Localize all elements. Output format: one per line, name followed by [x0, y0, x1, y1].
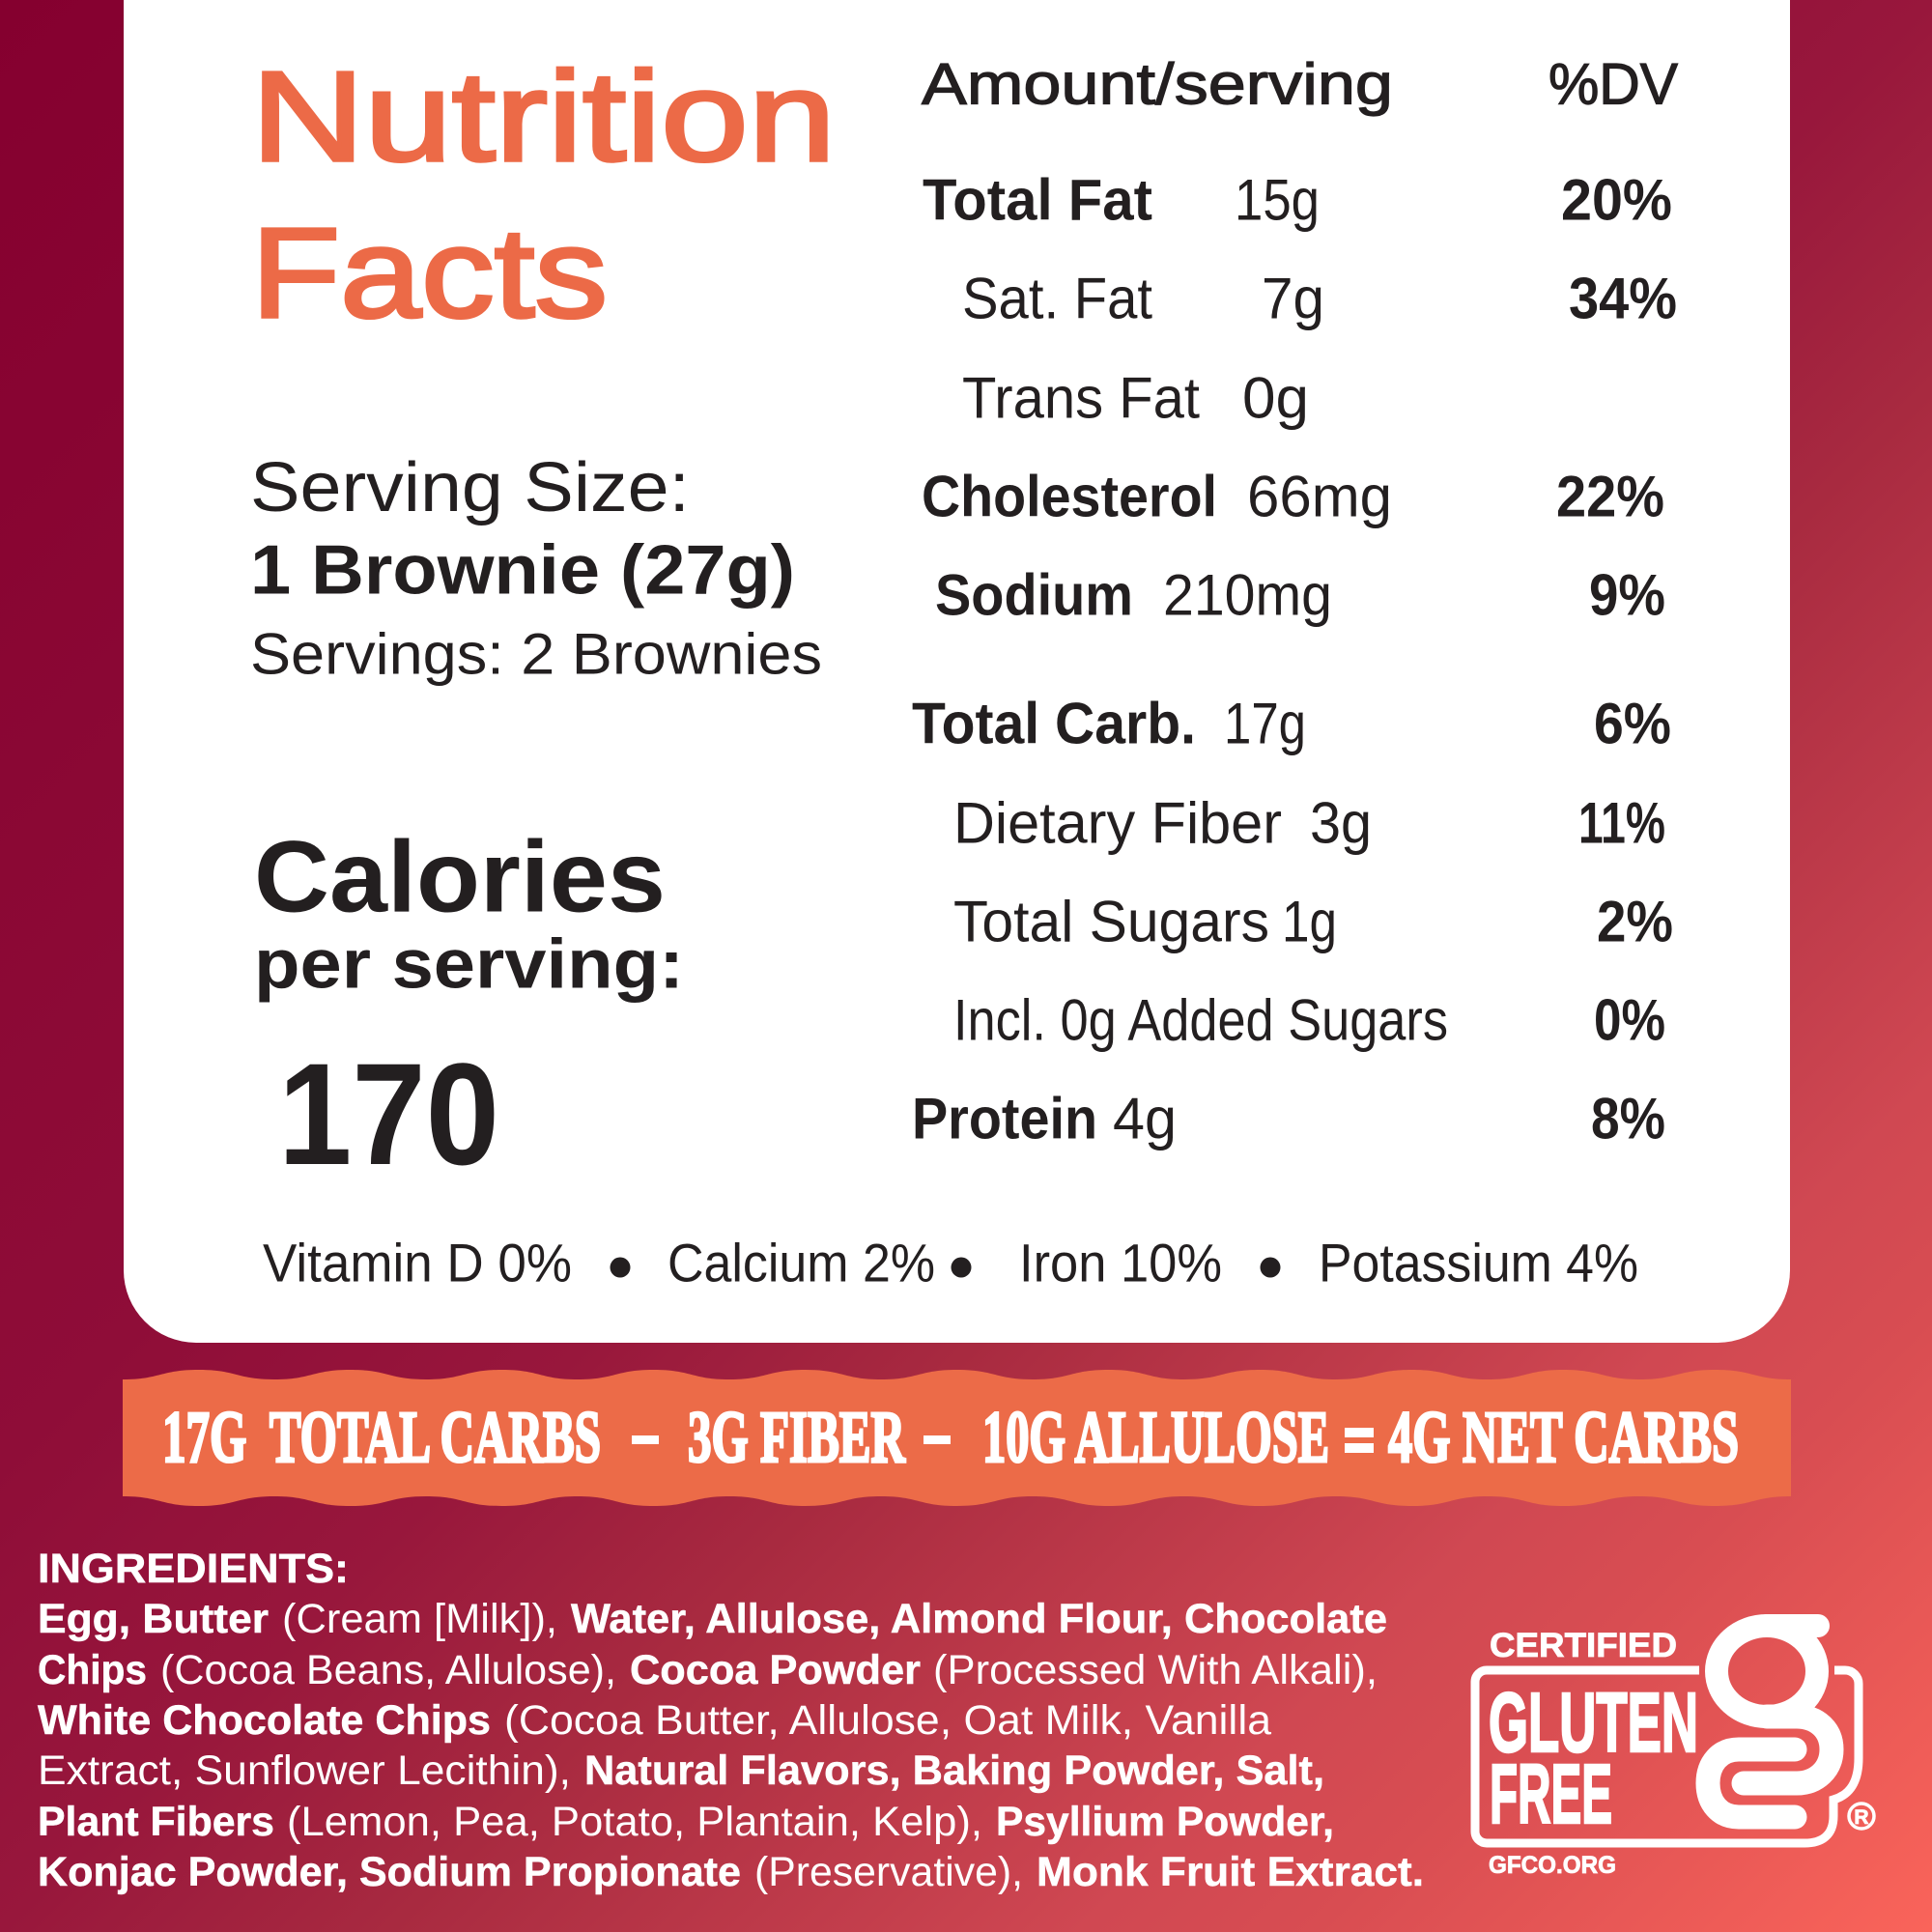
- row: cholesterol: 22%: [1556, 464, 1664, 529]
- table header: [922, 52, 1678, 116]
- row: total sugars: 1g: [1282, 889, 1337, 954]
- row: sodium: Sodium: [935, 562, 1133, 628]
- row: total carb: Total Carb.: [912, 692, 1196, 755]
- row: dietary fiber: 3g: [1310, 790, 1372, 856]
- banner text: 10G ALLULOSE: [982, 1397, 1329, 1478]
- row: sodium: 210mg: [1163, 562, 1332, 628]
- nutrition table: [912, 52, 1678, 1151]
- title: Nutrition: [251, 45, 836, 187]
- calories block: Calories: [254, 821, 666, 933]
- ingredients list: Monk Fruit Extract.: [1037, 1849, 1424, 1895]
- icon: certified gluten free logo: GFCO.ORG: [1489, 1852, 1616, 1879]
- ingredients list: Natural Flavors, Baking Powder, Salt,: [584, 1747, 1324, 1794]
- row: total fat: 20%: [1561, 168, 1672, 232]
- serving size block: 1 Brownie (27g): [250, 531, 795, 609]
- row: protein: 8%: [1591, 1086, 1665, 1151]
- row: trans fat: Trans Fat: [962, 365, 1200, 431]
- panel: nutrition facts card: [124, 0, 1790, 1343]
- row: total sugars: Total Sugars: [953, 889, 1269, 954]
- row: total carb: 17g: [1224, 692, 1306, 755]
- row: dietary fiber: [953, 790, 1665, 856]
- row: dietary fiber: 11%: [1578, 790, 1665, 856]
- ingredients list: (Lemon, Pea, Potato, Plantain, Kelp),: [287, 1799, 982, 1845]
- icon: certified gluten free logo: GLUTEN: [1489, 1676, 1698, 1770]
- table header: %DV: [1548, 52, 1678, 116]
- serving size block: [250, 449, 822, 686]
- row: added sugars: Incl. 0g Added Sugars: [953, 987, 1448, 1053]
- vitamins and minerals line: [263, 1233, 1638, 1293]
- row: cholesterol: [922, 464, 1664, 529]
- row: cholesterol: Cholesterol: [922, 464, 1217, 529]
- ingredients list: (Preservative),: [754, 1849, 1023, 1895]
- ingredients list: Water, Allulose, Almond Flour, Chocolate: [571, 1596, 1387, 1642]
- ingredients list: (Processed With Alkali),: [933, 1647, 1378, 1693]
- ingredients list: Plant Fibers: [38, 1799, 274, 1845]
- banner text: [162, 1397, 1739, 1478]
- ingredients list: Chips: [38, 1647, 147, 1693]
- row: protein: 4g: [1113, 1086, 1177, 1151]
- banner text: 17G TOTAL CARBS: [162, 1397, 601, 1478]
- ingredients list: (Cocoa Butter, Allulose, Oat Milk, Vanilla: [504, 1697, 1271, 1744]
- row: cholesterol: 66mg: [1247, 464, 1392, 529]
- row: sodium: [935, 562, 1665, 628]
- row: total sugars: [953, 889, 1673, 954]
- title: [251, 45, 836, 344]
- row: dietary fiber: Dietary Fiber: [953, 790, 1282, 856]
- ingredients list: Konjac Powder, Sodium Propionate: [38, 1849, 741, 1895]
- ingredients list: INGREDIENTS:: [38, 1546, 349, 1592]
- ingredients list: (Cocoa Beans, Allulose),: [160, 1647, 616, 1693]
- row: total carb: [912, 692, 1671, 755]
- row: protein: [912, 1086, 1665, 1151]
- row: saturated fat: 34%: [1569, 267, 1677, 330]
- net carbs banner: [123, 1370, 1791, 1506]
- ingredients list: Extract, Sunflower Lecithin),: [38, 1747, 571, 1794]
- ingredients list: Cocoa Powder: [630, 1647, 921, 1693]
- calories block: 170: [278, 1033, 499, 1195]
- serving size block: Servings: 2 Brownies: [250, 622, 822, 686]
- icon: certified gluten free logo: R: [1854, 1806, 1869, 1829]
- ingredients list: White Chocolate Chips: [38, 1697, 491, 1744]
- ingredients list: [38, 1546, 1424, 1895]
- ingredients list: (Cream [Milk]),: [282, 1596, 557, 1642]
- icon: certified gluten free logo: FREE: [1490, 1747, 1612, 1841]
- row: saturated fat: Sat. Fat: [962, 267, 1152, 330]
- row: saturated fat: [962, 267, 1677, 330]
- row: protein: Protein: [912, 1086, 1097, 1151]
- row: total fat: 15g: [1235, 168, 1320, 232]
- icon: certified gluten free logo: CERTIFIED: [1490, 1627, 1677, 1664]
- ingredients list: Psyllium Powder,: [996, 1799, 1334, 1845]
- vitamins and minerals line: Calcium 2%: [668, 1233, 935, 1293]
- table header: Amount/serving: [922, 52, 1393, 116]
- calories block: per serving:: [254, 925, 684, 1003]
- vitamins and minerals line: Potassium 4%: [1319, 1233, 1638, 1293]
- row: added sugars: 0%: [1594, 987, 1665, 1053]
- title: Facts: [251, 202, 608, 344]
- ingredients list: Egg, Butter: [38, 1596, 269, 1642]
- row: total fat: [923, 168, 1672, 232]
- row: total fat: Total Fat: [923, 168, 1152, 232]
- row: saturated fat: 7g: [1262, 267, 1324, 330]
- vitamins and minerals line: Iron 10%: [1019, 1233, 1222, 1293]
- calories block: [254, 821, 684, 1195]
- row: sodium: 9%: [1589, 562, 1665, 628]
- vitamins and minerals line: Vitamin D 0%: [263, 1233, 572, 1293]
- icon: certified gluten free logo: [1475, 1626, 1874, 1879]
- banner text: 3G FIBER: [688, 1397, 906, 1478]
- row: total carb: 6%: [1594, 692, 1671, 755]
- banner text: 4G NET CARBS: [1388, 1397, 1739, 1478]
- row: trans fat: 0g: [1242, 365, 1309, 431]
- row: total sugars: 2%: [1597, 889, 1673, 954]
- serving size block: Serving Size:: [250, 449, 690, 526]
